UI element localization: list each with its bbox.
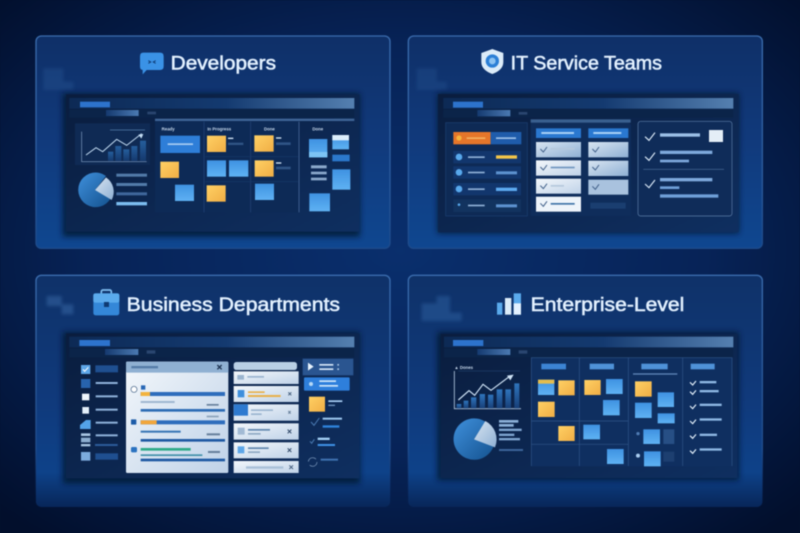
checklist (690, 381, 722, 453)
app window (63, 332, 360, 484)
status columns (531, 119, 631, 216)
heading: IT Service Teams (481, 49, 662, 74)
ticket queue (446, 123, 527, 216)
panel: Enterprise-Level (408, 275, 762, 507)
kanban board: Done (264, 126, 275, 131)
panel: Business Departments (36, 275, 390, 507)
heading: Business Departments (93, 290, 340, 316)
heading: Developers: Developers (171, 53, 276, 74)
kanban board: Done (312, 126, 324, 131)
kanban board (531, 358, 732, 466)
line chart (75, 123, 150, 165)
heading: IT Service Teams: IT Service Teams (511, 53, 662, 74)
main task card (126, 362, 228, 473)
heading: Business Departments: Business Departments (127, 295, 340, 316)
heading: Developers (140, 53, 276, 74)
kanban board: In Progress (207, 126, 232, 131)
activity rail (303, 359, 353, 466)
kanban board (155, 119, 354, 212)
app window (437, 332, 739, 480)
sidebar (80, 365, 118, 461)
heading: Enterprise-Level: Enterprise-Level (531, 295, 684, 316)
checklist (638, 121, 732, 216)
trend chart (454, 365, 521, 409)
trend chart: ▲ Dones (454, 365, 474, 370)
pie chart (454, 418, 523, 460)
pie chart (78, 173, 147, 207)
task list (234, 362, 299, 473)
panel: IT Service Teams (408, 36, 762, 248)
app window (63, 93, 360, 237)
panel: Developers (36, 36, 390, 248)
kanban board: Ready (162, 126, 175, 131)
app window (437, 93, 739, 233)
heading: Enterprise-Level (497, 293, 684, 316)
